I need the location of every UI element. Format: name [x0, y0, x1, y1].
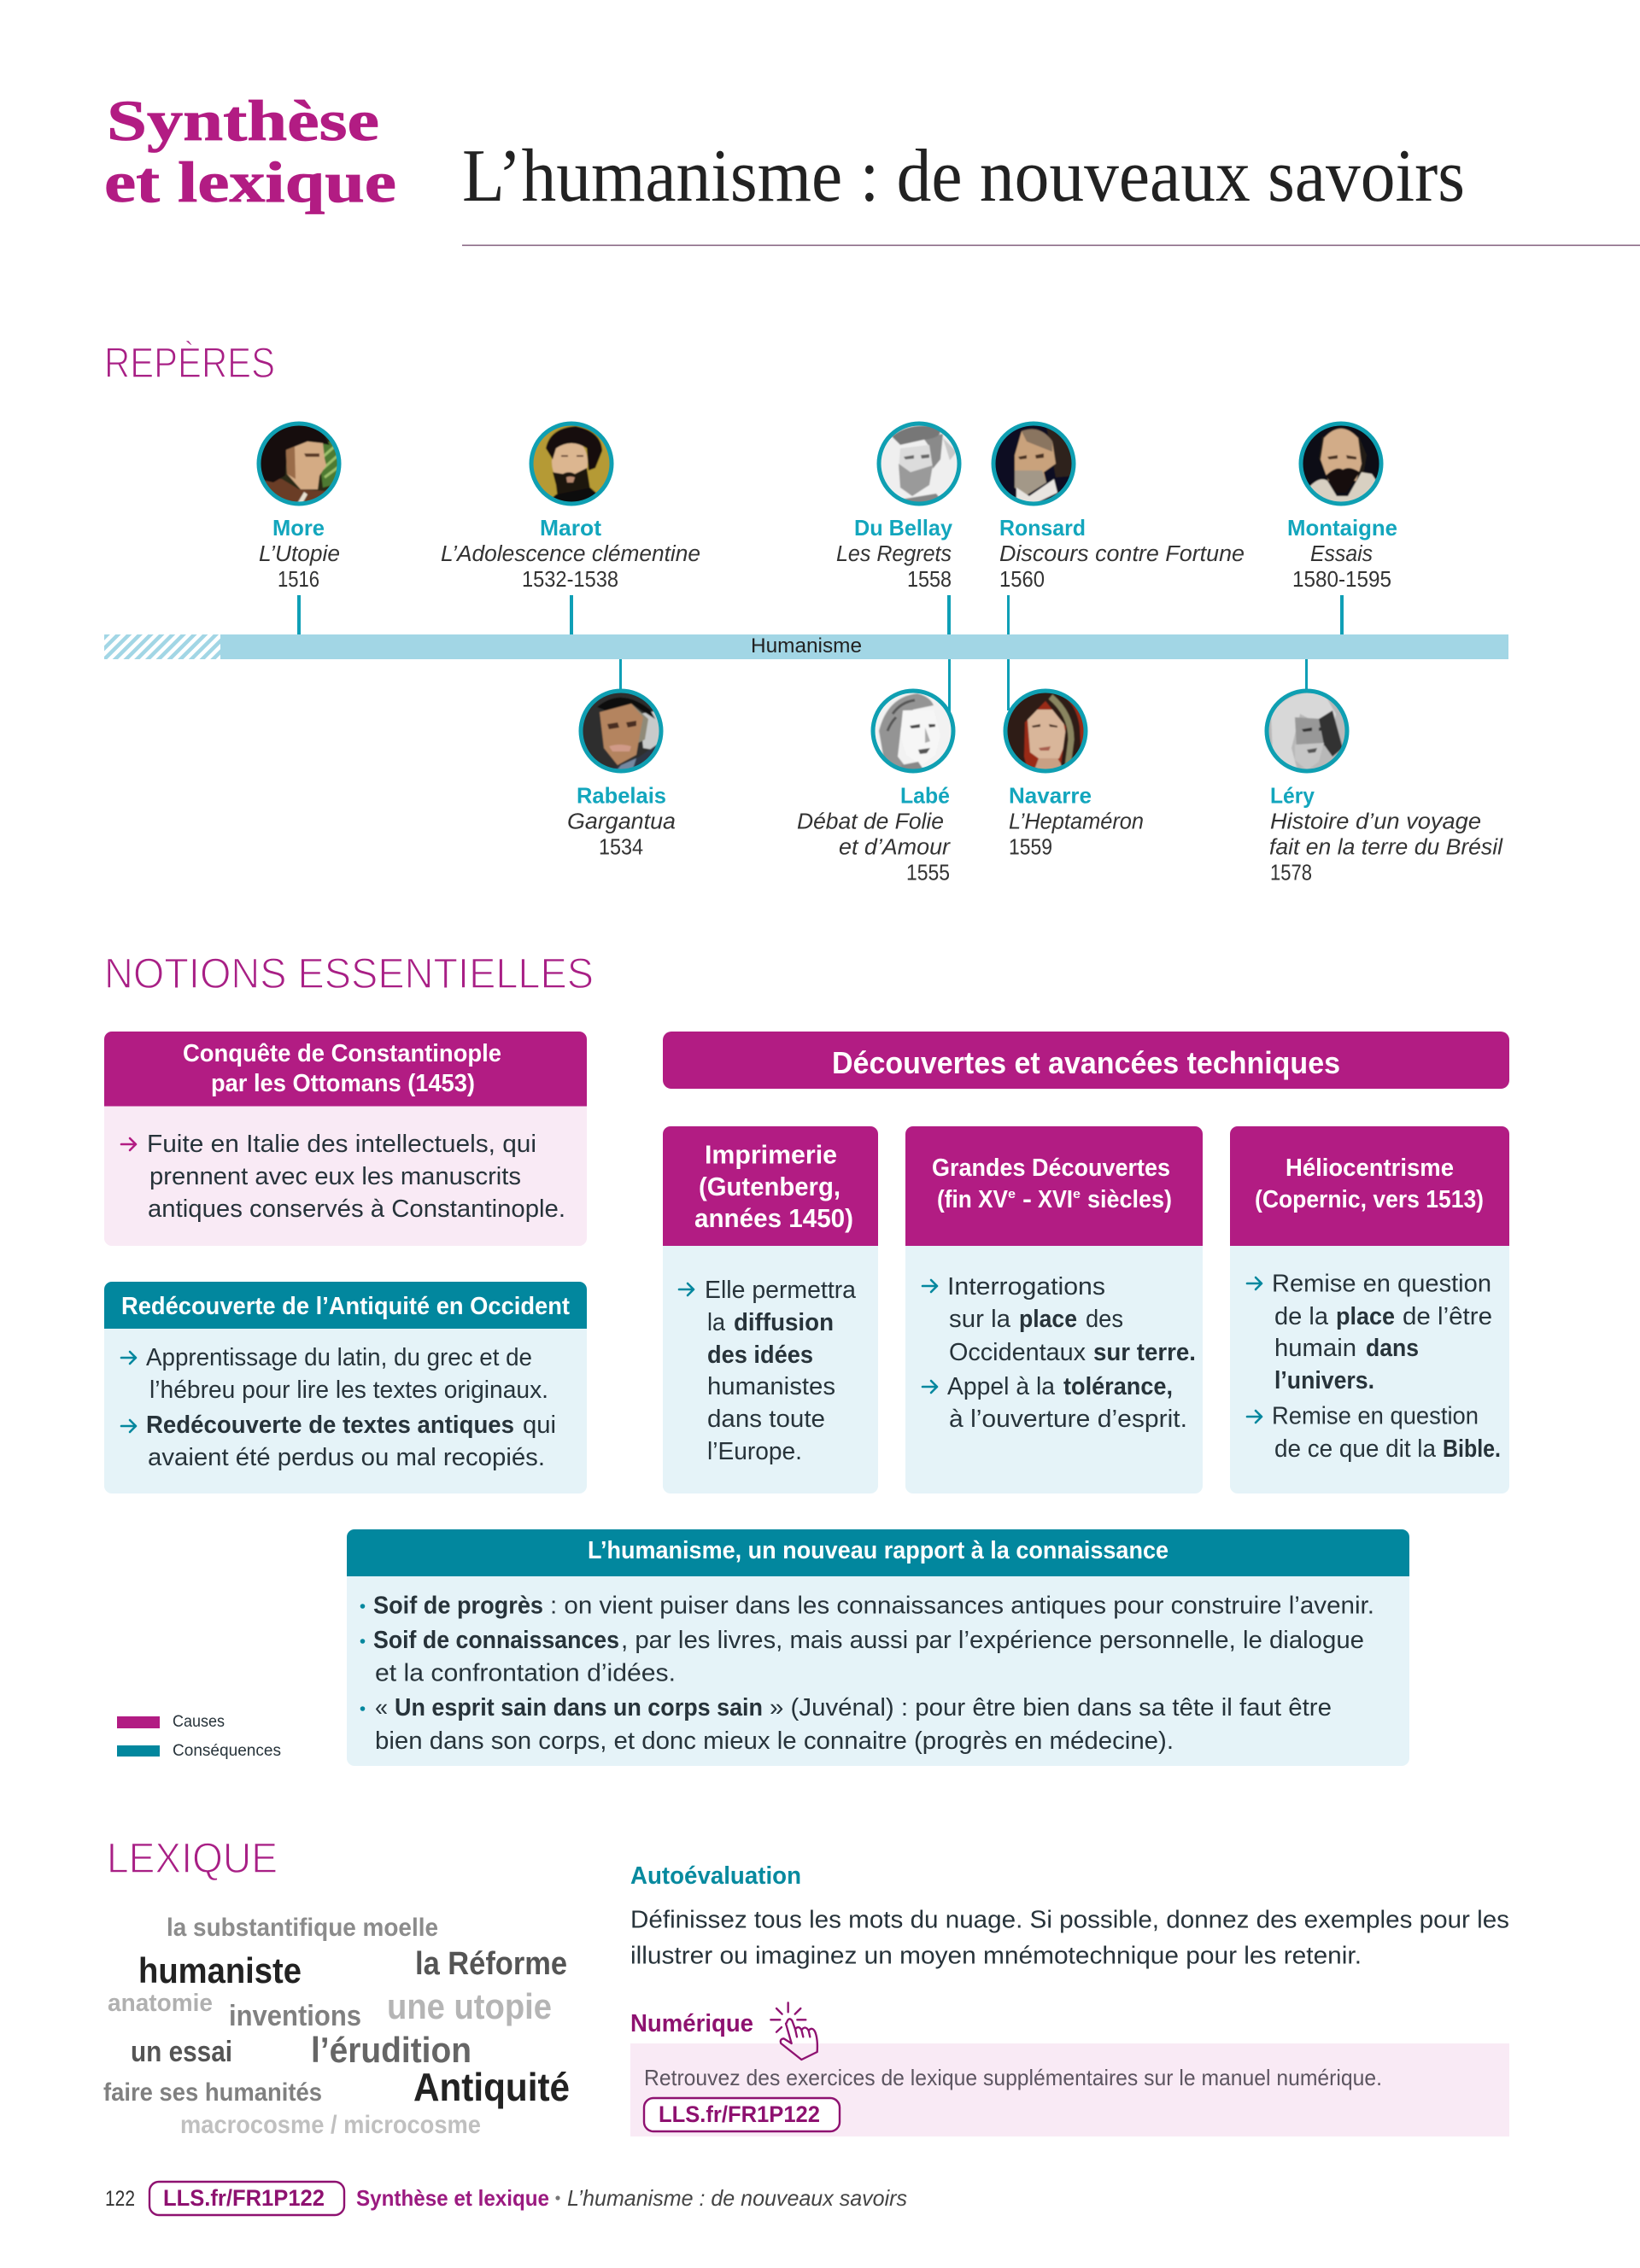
panel: Grandes Découvertes: Occidentaux — [949, 1339, 1086, 1366]
person: Rabelais — [567, 688, 676, 859]
person: Léry — [1264, 688, 1503, 885]
person: Navarre: Navarre — [1009, 782, 1092, 808]
heading: Repères: REPÈRES — [104, 339, 275, 387]
person: Marot: 1532-1538 — [522, 568, 618, 592]
person: Labé: Débat de Folie — [797, 810, 944, 833]
person: More — [256, 421, 342, 592]
person: Ronsard — [991, 421, 1245, 592]
panel: Conquête de Constantinople: par les Ottomans (1453) — [211, 1070, 475, 1097]
banner: Découvertes et avancées techniques — [663, 1032, 1509, 1089]
footer — [105, 2182, 907, 2215]
footer: L’humanisme : de nouveaux savoirs — [567, 2185, 907, 2211]
panel: Grandes Découvertes: place — [1019, 1306, 1077, 1333]
person: Léry: fait en la terre du Brésil — [1269, 835, 1503, 859]
panel: L'humanisme, un nouveau rapport à la connaissance: » (Juvénal) : pour être bien dans sa tête il faut être — [770, 1694, 1332, 1721]
panel: Imprimerie: humanistes — [707, 1373, 835, 1400]
panel: Grandes Découvertes: e — [1073, 1187, 1081, 1201]
person: Marot: Marot — [540, 515, 601, 541]
word cloud: macrocosme / microcosme — [180, 2111, 481, 2139]
person: Léry: 1578 — [1270, 861, 1312, 885]
person: Montaigne: 1580-1595 — [1292, 568, 1391, 592]
panel: Imprimerie: dans toute — [707, 1406, 825, 1433]
panel: L'humanisme, un nouveau rapport à la connaissance: Soif de progrès — [373, 1592, 543, 1619]
panel: L'humanisme, un nouveau rapport à la connaissance: « — [375, 1694, 388, 1721]
person: Labé: 1555 — [906, 861, 950, 885]
panel: Héliocentrisme: Bible. — [1443, 1435, 1501, 1463]
panel: Grandes Découvertes: - — [1022, 1186, 1032, 1213]
panel: Héliocentrisme: (Copernic, vers 1513) — [1255, 1186, 1484, 1213]
footer: Synthèse et lexique — [356, 2185, 549, 2211]
panel: Imprimerie: Imprimerie — [705, 1139, 837, 1170]
panel: Grandes Découvertes: Interrogations — [947, 1273, 1105, 1301]
word cloud: la substantifique moelle — [167, 1914, 438, 1942]
person: Labé: Labé — [900, 782, 950, 808]
person: Rabelais: Rabelais — [577, 782, 666, 808]
panel: L'humanisme, un nouveau rapport à la connaissance: Un esprit sain dans un corps sain — [395, 1694, 763, 1721]
person: More: 1516 — [278, 568, 319, 592]
panel: L'humanisme, un nouveau rapport à la connaissance — [347, 1529, 1409, 1766]
person: Montaigne: Montaigne — [1287, 515, 1397, 541]
self-assessment: Autoévaluation — [630, 1862, 801, 1890]
panel: Héliocentrisme: de la — [1274, 1303, 1329, 1330]
panel: Numérique — [630, 2002, 1509, 2136]
panel: Héliocentrisme: place — [1336, 1303, 1395, 1330]
panel: Imprimerie — [663, 1126, 878, 1493]
panel: Redécouverte de l'Antiquité: qui — [523, 1412, 556, 1439]
legend: Causes — [173, 1713, 225, 1731]
panel: L'humanisme, un nouveau rapport à la connaissance: et la confrontation d’idées. — [375, 1660, 676, 1687]
person: Ronsard: Ronsard — [999, 515, 1086, 541]
person: Montaigne — [1287, 421, 1397, 592]
panel: Redécouverte de l'Antiquité: avaient été perdus ou mal recopiés. — [148, 1444, 545, 1471]
panel: Héliocentrisme: Remise en question — [1272, 1271, 1491, 1298]
person: Montaigne: Essais — [1310, 542, 1373, 566]
person: Du Bellay: 1558 — [907, 568, 952, 592]
section tag: Synthèse et lexique: et lexique — [104, 149, 396, 214]
word cloud: une utopie — [387, 1986, 552, 2026]
panel: Grandes Découvertes: des — [1086, 1306, 1123, 1333]
word cloud: un essai — [131, 2036, 232, 2068]
word cloud: anatomie — [108, 1990, 213, 2017]
person: Labé — [797, 688, 956, 885]
panel: Grandes Découvertes: sur terre. — [1093, 1339, 1196, 1366]
panel: Grandes Découvertes — [905, 1126, 1203, 1493]
person: Labé: et d’Amour — [839, 835, 952, 859]
person: Du Bellay: Du Bellay — [854, 515, 953, 541]
panel: Conquête de Constantinople: Fuite en Italie des intellectuels, qui — [147, 1131, 536, 1158]
self-assessment: Définissez tous les mots du nuage. Si possible, donnez des exemples pour les — [630, 1906, 1509, 1933]
panel: Redécouverte de l'Antiquité: Apprentissage du latin, du grec et de — [146, 1344, 532, 1371]
person: Ronsard: 1560 — [999, 568, 1045, 592]
person: Léry: Histoire d’un voyage — [1270, 810, 1481, 833]
self-assessment: illustrer ou imaginez un moyen mnémotechnique pour les retenir. — [630, 1942, 1362, 1969]
panel: L'humanisme, un nouveau rapport à la connaissance: Soif de connaissances — [373, 1627, 619, 1654]
panel: Conquête de Constantinople — [104, 1032, 587, 1246]
panel: Conquête de Constantinople: Conquête de Constantinople — [183, 1040, 501, 1067]
panel: Imprimerie: années 1450) — [694, 1203, 853, 1233]
person: Du Bellay: Les Regrets — [836, 542, 952, 566]
panel: Grandes Découvertes: (fin XV — [937, 1186, 1009, 1213]
heading: Lexique: LEXIQUE — [107, 1834, 278, 1882]
panel: Redécouverte de l'Antiquité: Redécouverte de l’Antiquité en Occident — [121, 1293, 570, 1320]
person: Navarre: 1559 — [1009, 835, 1052, 859]
panel: Héliocentrisme: Héliocentrisme — [1286, 1154, 1454, 1182]
person: Marot — [441, 421, 700, 592]
panel: Héliocentrisme: de ce que dit la — [1274, 1435, 1437, 1463]
panel: Imprimerie: l’Europe. — [707, 1438, 802, 1465]
panel: Grandes Découvertes: XVI — [1038, 1186, 1073, 1213]
panel: Conquête de Constantinople: prennent avec eux les manuscrits — [149, 1163, 521, 1190]
banner: Découvertes et avancées techniques: Découvertes et avancées techniques — [832, 1045, 1340, 1080]
panel: Héliocentrisme: Remise en question — [1272, 1402, 1479, 1429]
section tag: Synthèse et lexique — [104, 88, 396, 214]
panel: Grandes Découvertes: Grandes Découvertes — [932, 1154, 1170, 1182]
panel: Imprimerie: des idées — [707, 1342, 813, 1369]
panel: L'humanisme, un nouveau rapport à la connaissance: : on vient puiser dans les connaissances antiques pour construire l’avenir. — [550, 1592, 1374, 1619]
panel: Imprimerie: Elle permettra — [705, 1277, 857, 1304]
panel: Héliocentrisme: dans — [1366, 1335, 1419, 1362]
panel: Grandes Découvertes: tolérance, — [1063, 1373, 1173, 1400]
word cloud: inventions — [229, 2000, 361, 2032]
panel: Héliocentrisme: l’univers. — [1274, 1367, 1374, 1394]
word cloud: la Réforme — [415, 1946, 567, 1982]
heading: Notions essentielles: NOTIONS ESSENTIELLES — [104, 950, 594, 997]
person: Ronsard: Discours contre Fortune — [999, 542, 1245, 566]
panel: L'humanisme, un nouveau rapport à la connaissance: , par les livres, mais aussi par l’expérience personnelle, le dialogue — [621, 1627, 1364, 1654]
person: Navarre: L’Heptaméron — [1009, 810, 1144, 833]
legend — [117, 1713, 281, 1760]
footer: LLS.fr/FR1P122 — [163, 2185, 325, 2211]
word cloud: faire ses humanités — [103, 2078, 322, 2107]
panel: Grandes Découvertes: à l’ouverture d’esprit. — [949, 1406, 1187, 1433]
panel: Numérique: Retrouvez des exercices de lexique supplémentaires sur le manuel numérique. — [644, 2065, 1382, 2090]
panel: Grandes Découvertes: siècles) — [1087, 1186, 1172, 1213]
timeline bar: Humanisme — [751, 634, 862, 658]
word cloud: l’érudition — [311, 2030, 472, 2070]
panel: Grandes Découvertes: sur la — [949, 1306, 1011, 1333]
person: Du Bellay — [836, 421, 962, 592]
panel: Redécouverte de l'Antiquité: Redécouverte de textes antiques — [146, 1412, 514, 1439]
footer: 122 — [105, 2187, 135, 2211]
panel: Imprimerie: diffusion — [734, 1309, 834, 1336]
word cloud: humaniste — [138, 1950, 302, 1990]
person: Rabelais: 1534 — [599, 835, 643, 859]
person: Rabelais: Gargantua — [567, 810, 676, 833]
panel: Héliocentrisme — [1230, 1126, 1509, 1493]
panel: Conquête de Constantinople: antiques conservés à Constantinople. — [148, 1195, 565, 1223]
panel: Grandes Découvertes: e — [1008, 1187, 1016, 1201]
panel: Redécouverte de l'Antiquité: l’hébreu pour lire les textes originaux. — [149, 1377, 548, 1404]
panel: Numérique: LLS.fr/FR1P122 — [659, 2101, 820, 2127]
self-assessment — [630, 1862, 1509, 1969]
panel: Numérique: Numérique — [630, 2010, 753, 2037]
person: More: L’Utopie — [259, 542, 340, 566]
timeline — [104, 421, 1508, 885]
person: Marot: L’Adolescence clémentine — [441, 542, 700, 566]
icon: pointing hand — [770, 2002, 817, 2060]
section tag: Synthèse et lexique: Synthèse — [107, 88, 379, 153]
title: L’humanisme : de nouveaux savoirs — [462, 135, 1465, 218]
panel: Imprimerie: (Gutenberg, — [699, 1172, 840, 1201]
panel: Héliocentrisme: humain — [1274, 1335, 1356, 1362]
legend: Conséquences — [173, 1742, 281, 1760]
panel: L'humanisme, un nouveau rapport à la connaissance: L’humanisme, un nouveau rapport à la connaissance — [588, 1537, 1168, 1564]
word cloud — [103, 1914, 570, 2139]
timeline bar — [104, 634, 1508, 659]
panel: L'humanisme, un nouveau rapport à la connaissance: bien dans son corps, et donc mieux le connaitre (progrès en médecine). — [375, 1727, 1174, 1755]
panel: Héliocentrisme: de l’être — [1403, 1303, 1492, 1330]
word cloud: Antiquité — [413, 2065, 570, 2109]
person: Léry: Léry — [1270, 782, 1315, 808]
panel: Grandes Découvertes: Appel à la — [947, 1373, 1056, 1400]
person: More: More — [272, 515, 325, 541]
person: Navarre — [1003, 688, 1144, 859]
panel: Redécouverte de l'Antiquité — [104, 1282, 587, 1493]
panel: Imprimerie: la — [707, 1309, 726, 1336]
